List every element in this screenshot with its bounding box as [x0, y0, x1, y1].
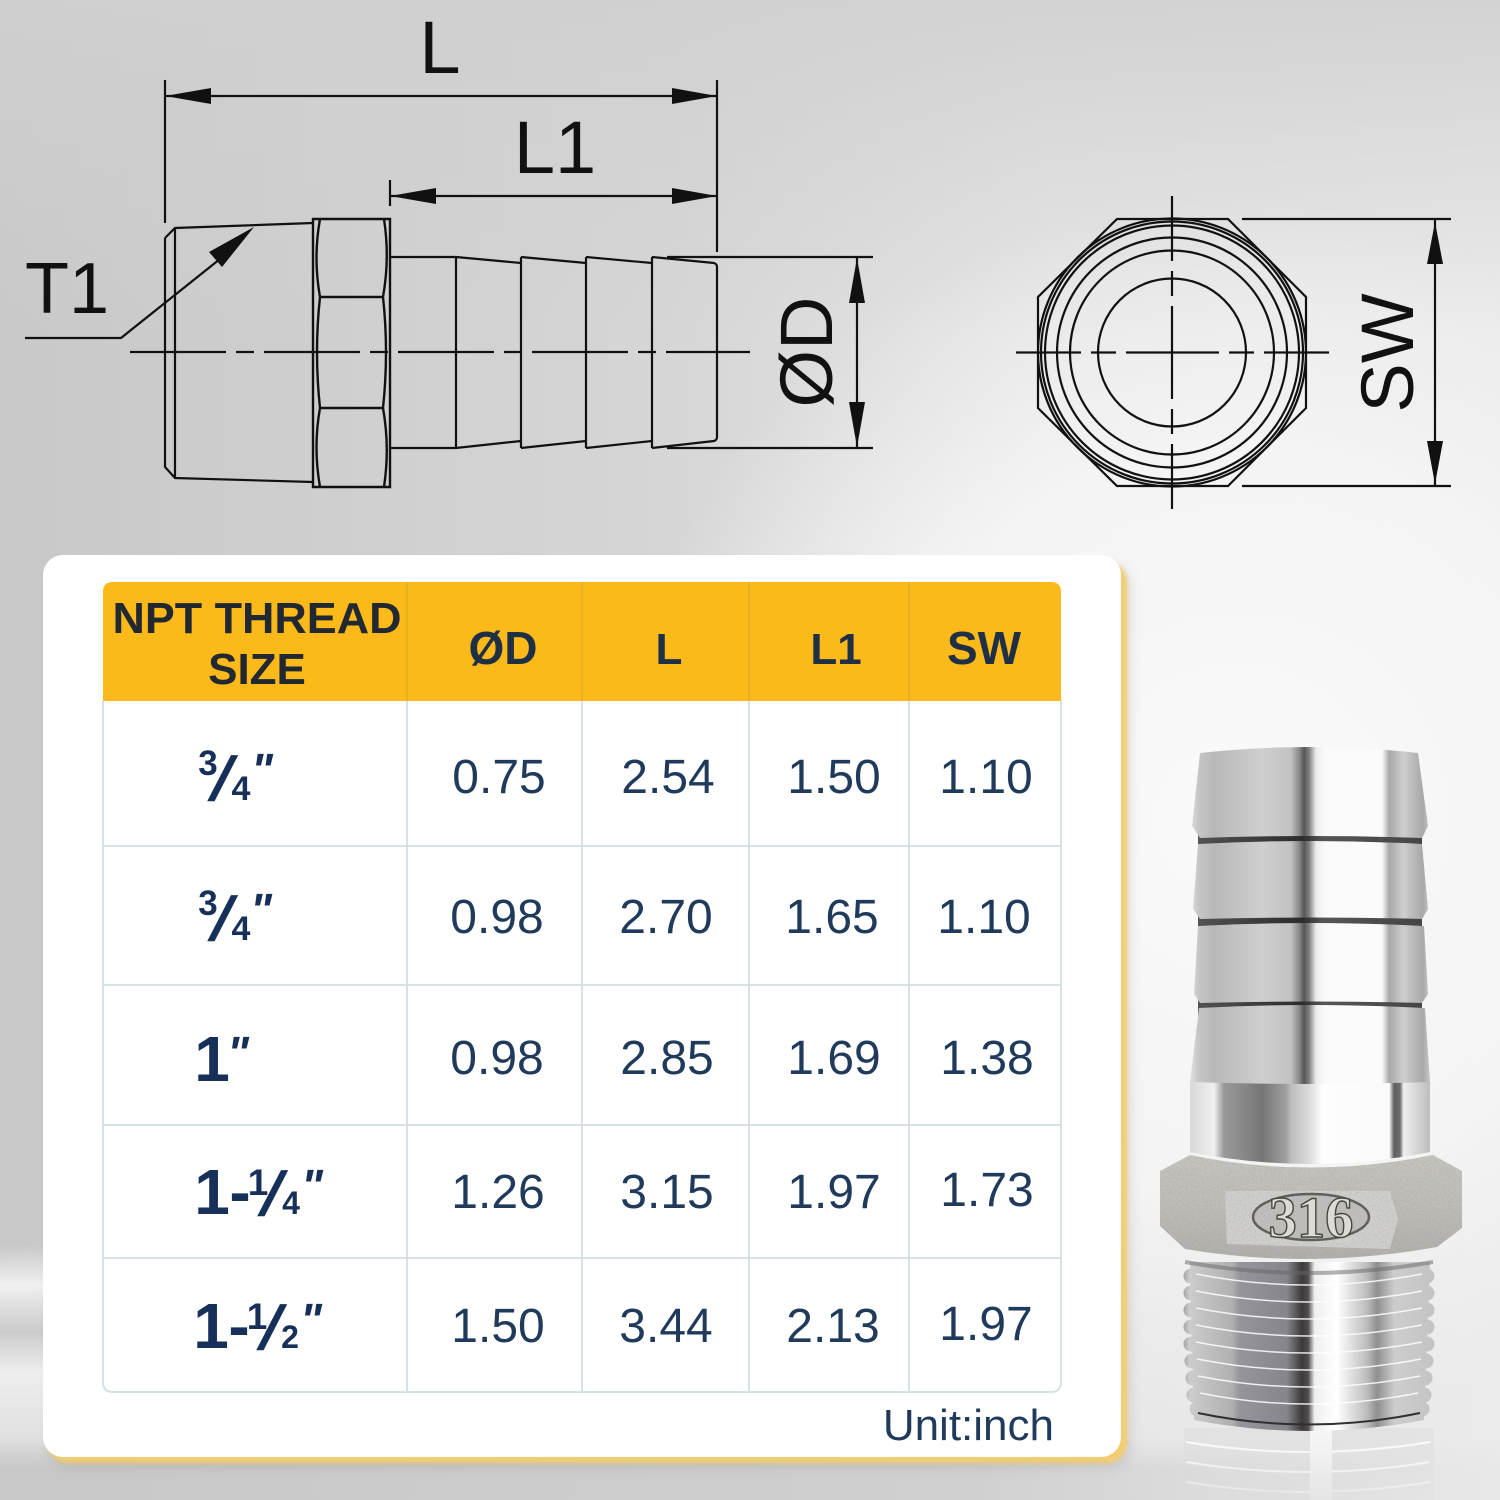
- barbs: [390, 257, 717, 448]
- row 1: 1.10: [939, 751, 1033, 804]
- hex body: [1160, 1155, 1462, 1259]
- callout T1: [25, 227, 254, 338]
- row 1: ": [251, 744, 274, 796]
- row 4: ": [301, 1160, 324, 1212]
- row 2: 1.10: [937, 891, 1031, 944]
- 316 stamp: 316: [1268, 1185, 1354, 1250]
- row 5: /: [252, 1293, 292, 1363]
- row 1: 3: [198, 744, 218, 783]
- 316 stamp: [1225, 1185, 1398, 1250]
- row 2: 3: [198, 884, 218, 923]
- row 1: 0.75: [452, 751, 546, 804]
- table header: ØD: [468, 622, 538, 674]
- barb 3: [1194, 923, 1428, 1003]
- dimension L: L: [419, 6, 461, 89]
- table header: L: [656, 625, 682, 674]
- dimension SW: SW: [1346, 293, 1429, 413]
- dimension OD: [667, 257, 873, 448]
- row 1: 1.50: [787, 751, 881, 804]
- technical drawing: end view: [1016, 196, 1451, 510]
- center line: [130, 351, 750, 353]
- thread body: [165, 223, 313, 482]
- row 5: -: [228, 1290, 250, 1362]
- row 3: 1.38: [940, 1032, 1034, 1085]
- row 4: 3.15: [620, 1166, 714, 1219]
- row 5: 2.13: [786, 1300, 880, 1353]
- row 5: 1.97: [939, 1298, 1033, 1351]
- row 2: 1.65: [785, 891, 879, 944]
- barb 4: [1190, 1005, 1430, 1084]
- photo: stainless steel hose barb fitting: [1160, 747, 1462, 1500]
- row 2: /: [203, 884, 243, 954]
- row 3: 1: [194, 1023, 230, 1095]
- row 5: 3.44: [619, 1300, 713, 1353]
- row 5: 1: [247, 1296, 267, 1337]
- row 2: 2.70: [619, 891, 713, 944]
- row 3: 0.98: [450, 1032, 544, 1085]
- dimension OD: ØD: [765, 296, 848, 408]
- row 2: [198, 884, 1031, 954]
- row 5: 2: [281, 1319, 299, 1355]
- row 4: 1: [248, 1162, 268, 1203]
- row 3: [194, 1023, 1034, 1095]
- center lines: [1016, 196, 1329, 510]
- row 5: [193, 1290, 1033, 1363]
- table header: L1: [810, 625, 862, 674]
- row 2: 0.98: [450, 891, 544, 944]
- table header: SIZE: [208, 645, 306, 694]
- row 2: ": [250, 884, 273, 936]
- row 1: 4: [232, 770, 251, 808]
- barb neck: [1198, 826, 1422, 1016]
- table header: NPT THREAD: [112, 594, 402, 643]
- row 3: 2.85: [620, 1032, 714, 1085]
- row 3: ": [227, 1027, 250, 1079]
- barb 1: [1192, 747, 1428, 838]
- technical drawing: side view: [25, 6, 873, 487]
- barb 2: [1193, 841, 1428, 919]
- male thread: [1185, 1262, 1433, 1431]
- concentric circles: [1038, 218, 1306, 486]
- hex nut: [313, 219, 390, 487]
- row 1: 2.54: [621, 751, 715, 804]
- dimension L: [165, 6, 717, 252]
- row 4: 1: [194, 1156, 230, 1228]
- row 1: [198, 744, 1033, 814]
- dimension L1: [390, 106, 717, 206]
- callout T1: T1: [25, 249, 109, 329]
- row 3: 1.69: [787, 1032, 881, 1085]
- octagon outline: [1038, 219, 1306, 486]
- smooth cylinder: [1190, 1078, 1430, 1164]
- row 5: ": [300, 1294, 323, 1346]
- row 4: -: [229, 1156, 251, 1228]
- row 1: /: [203, 744, 243, 814]
- row 2: 4: [232, 910, 251, 948]
- row 4: 1.26: [451, 1166, 545, 1219]
- row 4: 1.73: [940, 1164, 1034, 1217]
- row 4: 1.97: [787, 1166, 881, 1219]
- table grid: [103, 701, 1061, 1392]
- unit note: Unit:inch: [883, 1401, 1054, 1450]
- table header: [103, 582, 1061, 701]
- dimension SW: [1242, 219, 1451, 486]
- dimensions table: [103, 582, 1061, 1392]
- row 4: 4: [282, 1185, 300, 1221]
- reflection: [1186, 1430, 1430, 1492]
- row 5: 1: [193, 1290, 229, 1362]
- panel: table card: [43, 555, 1130, 1466]
- row 4: /: [253, 1159, 293, 1229]
- dimension L1: L1: [514, 106, 596, 189]
- row 5: 1.50: [451, 1300, 545, 1353]
- table header: SW: [947, 622, 1022, 674]
- row 4: [194, 1156, 1034, 1229]
